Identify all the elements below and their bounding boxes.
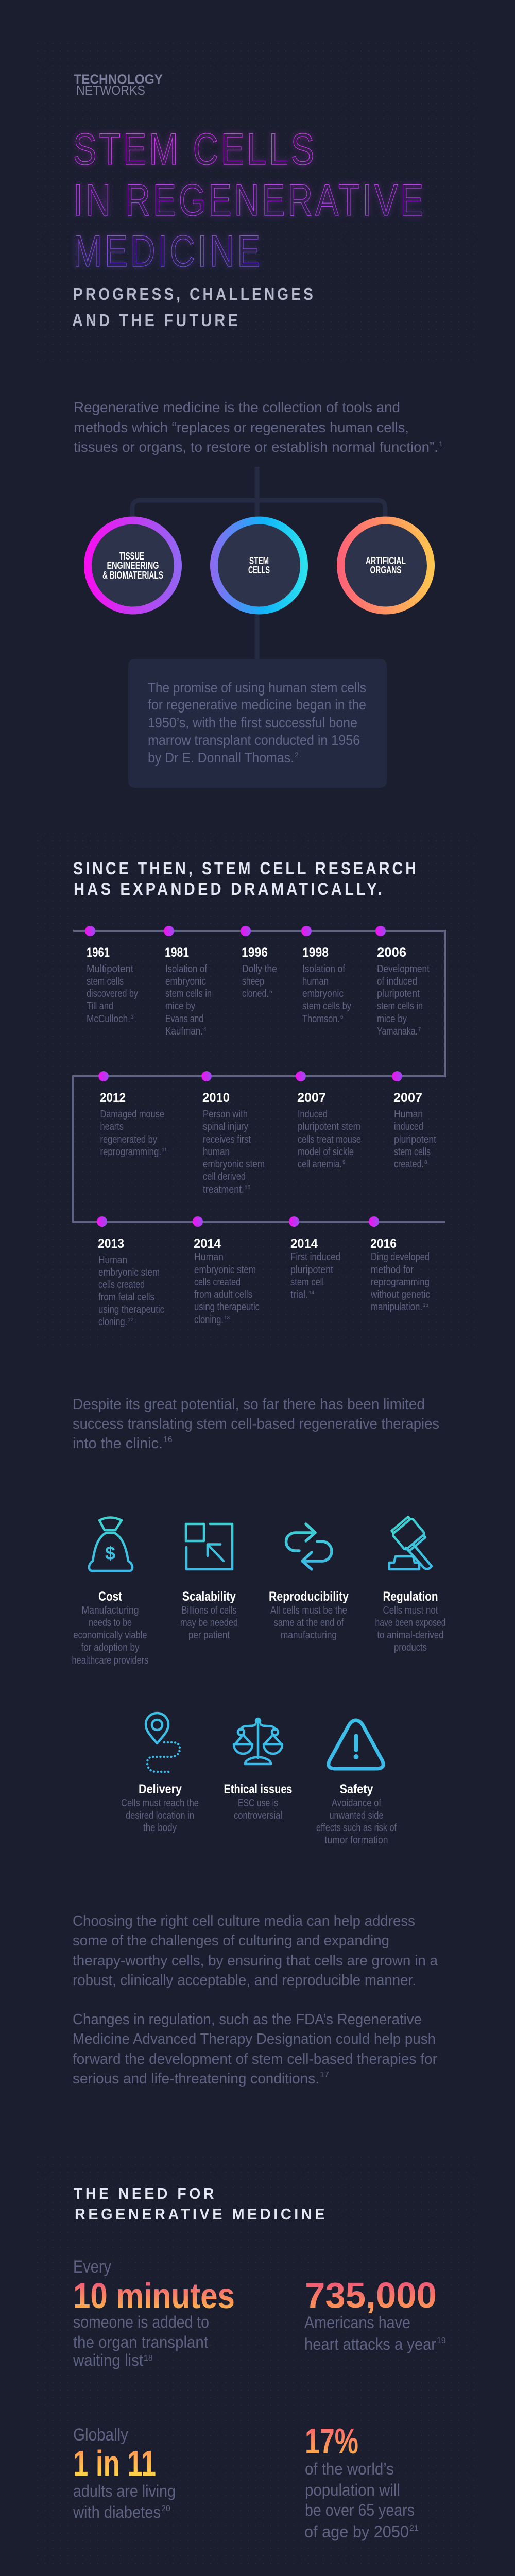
circle: tissue engineering: TISSUE <box>119 551 144 562</box>
logo: Technology Networks: NETWORKS <box>76 82 145 98</box>
timeline <box>73 926 445 1328</box>
challenge: safety: effects such as risk of <box>316 1822 397 1834</box>
event: 1998: stem cells by <box>302 1001 351 1012</box>
heading: need for regenerative medicine <box>74 2184 328 2223</box>
paragraph: regulation <box>73 2011 437 2087</box>
event: 1961: 1961 <box>87 945 110 960</box>
paragraph: limited success: success translating stem cell-based regenerative therapies <box>73 1416 439 1432</box>
event: 2010: receives first <box>203 1134 251 1145</box>
event: 2014 iPSC trial <box>289 1216 340 1300</box>
stat: 1 in 11: with diabetes <box>73 2503 161 2521</box>
event: 1981: Kaufman. <box>165 1026 203 1037</box>
event: 2013: 12 <box>128 1317 134 1323</box>
stat: 17% <box>304 2421 419 2541</box>
event: 2016: 15 <box>423 1302 429 1308</box>
event: 2013: embryonic stem <box>98 1267 160 1278</box>
stat: 10 minutes: Every <box>73 2257 111 2277</box>
event: 2007 human iPSC: 2007 <box>393 1091 422 1105</box>
event: 2012: regenerated by <box>100 1134 157 1145</box>
event: 2007 human iPSC <box>392 1071 436 1170</box>
challenge: reproducibility: manufacturing <box>281 1630 337 1641</box>
event: 2014 iPSC trial: trial. <box>290 1289 308 1300</box>
event: 2016: Ding developed <box>371 1251 430 1263</box>
event: 1961: stem cells <box>87 976 124 987</box>
event: 2006: mice by <box>377 1013 407 1025</box>
stat: 10 minutes: 10 minutes <box>73 2276 235 2316</box>
stat: 735,000: Americans have <box>304 2313 410 2332</box>
callout: 1950s bone marrow transplant: 1950’s, with the first successful bone <box>148 715 357 731</box>
challenge: cost <box>72 1518 148 1666</box>
icon: money bag <box>89 1518 132 1571</box>
dot grid: need section <box>34 2150 477 2570</box>
challenge: scalability: Scalability <box>182 1589 236 1604</box>
event: 2014 iPSC trial: First induced <box>290 1251 340 1263</box>
challenge: scalability <box>180 1524 238 1641</box>
circle: tissue engineering: ENGINEERING <box>107 560 159 571</box>
event: 1981 <box>164 926 212 1037</box>
event: 1961 <box>85 926 138 1025</box>
subtitle <box>72 284 316 330</box>
event: 1998: human <box>302 976 329 987</box>
paragraph: limited success: into the clinic. <box>73 1435 163 1452</box>
event: 2010: human <box>203 1146 230 1158</box>
paragraph: regulation: 17 <box>320 2071 329 2079</box>
challenge: scalability: may be needed <box>180 1617 238 1629</box>
event: 2014 adult cells: Human <box>194 1251 224 1263</box>
challenge: delivery: the body <box>143 1822 177 1834</box>
icon: scale arrow <box>186 1524 232 1569</box>
event: 2006: 2006 <box>377 945 406 960</box>
event: 2010: spinal injury <box>203 1121 248 1132</box>
callout: 1950s bone marrow transplant <box>128 659 387 788</box>
challenge: ethical issues: Ethical issues <box>224 1782 293 1797</box>
stat: 735,000: 735,000 <box>305 2275 437 2315</box>
event: 2014 adult cells <box>193 1216 260 1326</box>
stat: 10 minutes: someone is added to <box>73 2313 209 2331</box>
event: 2016 <box>369 1216 430 1313</box>
event: 1961: discovered by <box>87 988 138 999</box>
stat: 17%: be over 65 years <box>305 2501 415 2519</box>
event: 1998: 1998 <box>302 945 329 960</box>
heading: need for regenerative medicine: THE NEED FOR <box>74 2184 217 2202</box>
event: 2010: Person with <box>203 1109 248 1120</box>
event: 2016: method for <box>371 1264 414 1276</box>
challenge: cost: healthcare providers <box>72 1655 148 1666</box>
stat: 735,000: heart attacks a year <box>304 2335 436 2353</box>
connector bracket <box>132 467 385 516</box>
event: 1961: McCulloch. <box>87 1013 130 1025</box>
event: 1996: Dolly the <box>242 963 277 975</box>
challenge: regulation: Cells must not <box>383 1605 438 1616</box>
event: 2016: 2016 <box>370 1236 397 1251</box>
callout: 1950s bone marrow transplant: for regenerative medicine began in the <box>148 697 366 713</box>
challenge: cost: economically viable <box>73 1630 147 1641</box>
callout: 1950s bone marrow transplant: The promise of using human stem cells <box>148 680 366 696</box>
circle: stem cells: STEM <box>249 555 269 567</box>
event: 2012: hearts <box>100 1121 124 1132</box>
challenge: regulation: to animal-derived <box>377 1630 444 1641</box>
event: 2007 iPSC sickle cell: 9 <box>342 1160 346 1165</box>
logo: Technology Networks <box>74 72 163 98</box>
event: 2007 iPSC sickle cell: cells treat mouse <box>298 1134 361 1145</box>
event: 1981: embryonic <box>165 976 206 987</box>
subtitle: AND THE FUTURE <box>72 311 241 330</box>
stat: 1 in 11: Globally <box>73 2425 128 2445</box>
icon: map pin with dotted path <box>146 1713 180 1772</box>
event: 2016: reprogramming <box>371 1277 430 1288</box>
challenge: scalability: Billions of cells <box>181 1605 237 1616</box>
paragraph: culture media: Choosing the right cell culture media can help address <box>73 1913 415 1929</box>
challenge: scalability: per patient <box>188 1630 230 1641</box>
event: 1961: Multipotent <box>87 963 133 975</box>
event: 2006 <box>375 926 430 1037</box>
event: 2014 adult cells: embryonic stem <box>194 1264 256 1276</box>
title: STEM CELLS <box>73 125 317 174</box>
icon: loop arrows <box>286 1524 332 1569</box>
subtitle: PROGRESS, CHALLENGES <box>73 284 316 303</box>
challenge: safety: Avoidance of <box>332 1798 381 1809</box>
stat: 17%: of age by 2050 <box>304 2522 409 2541</box>
challenge: delivery: Cells must reach the <box>121 1798 199 1809</box>
challenge: ethical issues <box>224 1719 293 1821</box>
event: 1996: cloned. <box>242 988 269 999</box>
paragraph: culture media: therapy-worthy cells, by ensuring that cells are grown in a <box>73 1953 438 1969</box>
event: 1981: 4 <box>203 1027 207 1032</box>
event: 2006: of induced <box>377 976 417 987</box>
stat: 10 minutes <box>73 2257 235 2369</box>
event: 2013: 2013 <box>98 1236 124 1251</box>
connector stem <box>254 615 260 659</box>
event: 1998 <box>301 926 351 1025</box>
callout: 1950s bone marrow transplant: 2 <box>295 751 299 759</box>
event: 1981: Evans and <box>165 1013 203 1025</box>
circle: stem cells: CELLS <box>248 565 270 576</box>
event: 2007 iPSC sickle cell: cell anemia. <box>298 1159 342 1170</box>
paragraph: regulation: forward the development of stem cell-based therapies for <box>73 2051 437 2067</box>
event: 2014 adult cells: cloning. <box>194 1314 224 1326</box>
title <box>73 125 426 276</box>
challenge: cost: Cost <box>98 1589 123 1604</box>
event: 2006: Development <box>377 963 430 975</box>
dot grid: timeline <box>34 828 477 1346</box>
challenge: delivery: desired location in <box>126 1810 194 1821</box>
event: 2007 human iPSC: created. <box>394 1159 424 1170</box>
event: 2014 adult cells: from adult cells <box>194 1289 252 1300</box>
event: 1996: 5 <box>269 989 272 995</box>
event: 2013: using therapeutic <box>98 1304 164 1315</box>
title: IN REGENERATIVE <box>73 176 426 225</box>
intro paragraph: tissues or organs, to restore or establish normal function”. <box>74 439 438 455</box>
event: 2014 iPSC trial: stem cell <box>290 1277 324 1288</box>
event: 2012: Damaged mouse <box>100 1109 164 1120</box>
paragraph: regulation: Medicine Advanced Therapy Designation could help push <box>73 2031 436 2047</box>
event: 2007 human iPSC: stem cells <box>394 1146 431 1158</box>
challenge: cost: for adoption by <box>81 1642 139 1653</box>
stat: 17%: 17% <box>305 2421 358 2461</box>
event: 1998: embryonic <box>302 988 344 999</box>
title: IN REGENERATIVE <box>73 176 426 225</box>
event: 2012: 11 <box>162 1147 167 1153</box>
event: 1961: Till and <box>87 1001 113 1012</box>
paragraph: limited success: 16 <box>163 1435 173 1444</box>
challenge: regulation: products <box>394 1642 427 1653</box>
event: 1998: 6 <box>340 1014 344 1020</box>
stat: 10 minutes: 18 <box>144 2354 153 2363</box>
callout: 1950s bone marrow transplant: by Dr E. Donnall Thomas. <box>148 750 294 766</box>
event: 2012: reprogramming. <box>100 1146 161 1158</box>
heading: timeline: SINCE THEN, STEM CELL RESEARCH <box>73 859 419 878</box>
event: 2007 iPSC sickle cell: Induced <box>298 1109 328 1120</box>
stat: 17%: 21 <box>409 2524 419 2533</box>
stat: 735,000 <box>304 2275 446 2353</box>
event: 2007 iPSC sickle cell: pluripotent stem <box>298 1121 360 1132</box>
event: 2012: 2012 <box>100 1091 126 1105</box>
title: MEDICINE <box>73 227 263 276</box>
stat: 10 minutes: the organ transplant <box>73 2333 208 2351</box>
event: 2010: embryonic stem <box>203 1159 265 1170</box>
event: 2006: Yamanaka. <box>377 1026 418 1037</box>
challenge: reproducibility: same at the end of <box>274 1617 344 1629</box>
paragraph: limited success <box>73 1396 439 1452</box>
stat: 735,000: 19 <box>437 2336 446 2345</box>
event: 2006: pluripotent <box>377 988 420 999</box>
paragraph: culture media <box>73 1913 438 1989</box>
circle: artificial organs: ARTIFICIAL <box>366 555 406 567</box>
challenge: ethical issues: ESC use is <box>238 1798 278 1809</box>
circle: artificial organs <box>337 516 435 614</box>
event: 2014 adult cells: using therapeutic <box>194 1301 260 1313</box>
event: 2006: stem cells in <box>377 1001 423 1012</box>
icon: warning triangle <box>329 1720 383 1769</box>
event: 2007 iPSC sickle cell: model of sickle <box>298 1146 354 1158</box>
event: 2016: without genetic <box>370 1289 430 1300</box>
event: 2012 <box>98 1071 167 1158</box>
challenge: safety: tumor formation <box>324 1835 388 1846</box>
stat: 17%: population will <box>305 2481 400 2499</box>
event: 2010 <box>201 1071 265 1195</box>
icon: gavel <box>389 1516 432 1569</box>
event: 1981: stem cells in <box>165 988 212 999</box>
intro paragraph: methods which “replaces or regenerates human cells, <box>74 419 409 435</box>
title: MEDICINE <box>73 227 263 276</box>
event: 2014 iPSC trial: 14 <box>308 1290 315 1296</box>
event: 1981: 1981 <box>165 945 189 960</box>
event: 2014 adult cells: 2014 <box>194 1236 221 1251</box>
event: 2006: 7 <box>418 1027 421 1032</box>
event: 2010: 10 <box>245 1185 251 1191</box>
event: 2007 human iPSC: pluripotent <box>394 1134 436 1145</box>
event: 2013: cells created <box>98 1279 145 1291</box>
challenge: cost: needs to be <box>89 1617 132 1629</box>
event: 2014 iPSC trial: 2014 <box>290 1236 318 1251</box>
circle: stem cells <box>210 516 308 614</box>
paragraph: culture media: some of the challenges of culturing and expanding <box>73 1933 389 1949</box>
event: 1981: Isolation of <box>165 963 207 975</box>
challenge: safety: unwanted side <box>330 1810 383 1821</box>
event: 2007 human iPSC: induced <box>394 1121 423 1132</box>
event: 2007 human iPSC: 8 <box>424 1160 427 1165</box>
heading: timeline <box>73 859 419 899</box>
intro paragraph <box>74 399 443 455</box>
intro paragraph: 1 <box>439 439 443 448</box>
stat: 1 in 11 <box>73 2425 176 2521</box>
stat: 1 in 11: adults are living <box>73 2482 176 2500</box>
event: 2013: from fetal cells <box>98 1292 154 1303</box>
intro paragraph: Regenerative medicine is the collection of tools and <box>74 399 400 415</box>
challenge: safety <box>316 1720 397 1846</box>
stat: 10 minutes: waiting list <box>73 2351 143 2369</box>
event: 2016: manipulation. <box>371 1301 422 1313</box>
circles: three pillars <box>84 516 435 614</box>
challenge: regulation: have been exposed <box>375 1617 446 1629</box>
icon: balance scales <box>234 1719 282 1764</box>
stat: 1 in 11: 1 in 11 <box>73 2443 156 2483</box>
challenge: delivery <box>121 1713 199 1834</box>
challenge: reproducibility: Reproducibility <box>269 1589 349 1604</box>
event: 1981: mice by <box>165 1001 195 1012</box>
stat: 1 in 11: 20 <box>161 2504 170 2513</box>
challenge: regulation <box>375 1516 446 1653</box>
event: 2013: cloning. <box>98 1316 127 1328</box>
challenge: ethical issues: controversial <box>234 1810 282 1821</box>
event: 2010: 2010 <box>202 1091 230 1105</box>
heading: timeline: HAS EXPANDED DRAMATICALLY. <box>74 879 385 899</box>
event: 2014 adult cells: cells created <box>194 1277 241 1288</box>
event: 1996: sheep <box>242 976 264 987</box>
event: 2007 iPSC sickle cell <box>296 1071 361 1170</box>
heading: need for regenerative medicine: REGENERATIVE MEDICINE <box>75 2205 328 2223</box>
challenge: cost: Manufacturing <box>81 1605 139 1616</box>
stat: 17%: of the world’s <box>305 2460 394 2478</box>
event: 1998: Isolation of <box>302 963 345 975</box>
paragraph: limited success: Despite its great potential, so far there has been limited <box>73 1396 425 1413</box>
event: 2010: cell derived <box>203 1171 246 1182</box>
timeline line <box>73 931 445 1222</box>
paragraph: regulation: Changes in regulation, such as the FDA’s Regenerative <box>73 2011 422 2028</box>
circle: tissue engineering <box>84 516 182 614</box>
challenge: reproducibility <box>269 1524 349 1641</box>
title: STEM CELLS <box>73 125 317 174</box>
challenge: safety: Safety <box>340 1782 373 1797</box>
paragraph: regulation: serious and life-threatening conditions. <box>73 2071 319 2087</box>
event: 2007 human iPSC: Human <box>394 1109 423 1120</box>
challenge: reproducibility: All cells must be the <box>270 1605 347 1616</box>
event: 2013 <box>97 1216 164 1328</box>
icon: money bag: $ <box>105 1543 115 1564</box>
callout: 1950s bone marrow transplant: marrow transplant conducted in 1956 <box>148 732 360 748</box>
event: 1961: 3 <box>131 1014 134 1020</box>
paragraph: culture media: robust, clinically acceptable, and reproducible manner. <box>73 1972 416 1989</box>
event: 2014 adult cells: 13 <box>224 1315 230 1321</box>
event: 1996 <box>241 926 277 999</box>
event: 2010: treatment. <box>203 1184 244 1195</box>
event: 1996: 1996 <box>242 945 268 960</box>
challenge: delivery: Delivery <box>139 1782 182 1797</box>
event: 1998: Thomson. <box>302 1013 340 1025</box>
challenge: regulation: Regulation <box>383 1589 438 1604</box>
circle: tissue engineering: & BIOMATERIALS <box>102 570 163 581</box>
logo: Technology Networks: TECHNOLOGY <box>74 72 163 87</box>
event: 2014 iPSC trial: pluripotent <box>290 1264 333 1276</box>
dot grid: header <box>34 40 477 362</box>
event: 2007 iPSC sickle cell: 2007 <box>297 1091 326 1105</box>
circle: artificial organs: ORGANS <box>370 565 402 576</box>
event: 2013: Human <box>98 1255 127 1266</box>
